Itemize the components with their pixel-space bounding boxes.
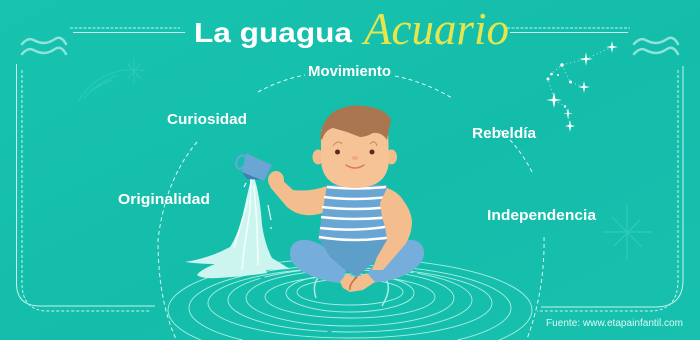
eyes xyxy=(335,150,340,154)
icon: constellation xyxy=(546,41,618,132)
ripples on the floor xyxy=(168,258,532,340)
ears xyxy=(312,150,324,164)
right leg xyxy=(368,240,424,283)
icon: aquarius waves right xyxy=(634,38,678,54)
striped tank top xyxy=(318,185,392,240)
title: La guagua xyxy=(194,17,352,48)
head xyxy=(321,118,389,188)
baby xyxy=(234,106,424,292)
feet xyxy=(340,273,375,292)
nose xyxy=(352,156,358,160)
cup xyxy=(234,153,272,181)
trait labels: Originalidad xyxy=(118,192,210,208)
dashed circle around baby xyxy=(158,75,544,339)
trait labels: Movimiento xyxy=(308,64,391,80)
icon: faint shooting star xyxy=(78,58,144,102)
title xyxy=(194,4,509,54)
diaper xyxy=(318,237,392,277)
title accent: Acuario: Acuario xyxy=(361,4,509,54)
water stream xyxy=(185,175,290,278)
other arm xyxy=(372,188,412,270)
trait labels xyxy=(118,64,597,224)
icon: faint sparkle xyxy=(602,205,652,260)
icon: aquarius waves left xyxy=(22,38,66,54)
trait labels: Curiosidad xyxy=(167,112,247,128)
trait labels: Independencia xyxy=(487,208,597,224)
trait labels: Rebeldía xyxy=(472,126,537,142)
mouth xyxy=(346,165,364,168)
decorative frame xyxy=(16,28,683,311)
source credit: Fuente: www.etapainfantil.com xyxy=(546,318,683,329)
hand xyxy=(268,171,284,189)
hair xyxy=(320,106,391,140)
left leg xyxy=(290,240,347,283)
raised arm xyxy=(270,178,327,215)
eyebrows xyxy=(333,142,377,146)
